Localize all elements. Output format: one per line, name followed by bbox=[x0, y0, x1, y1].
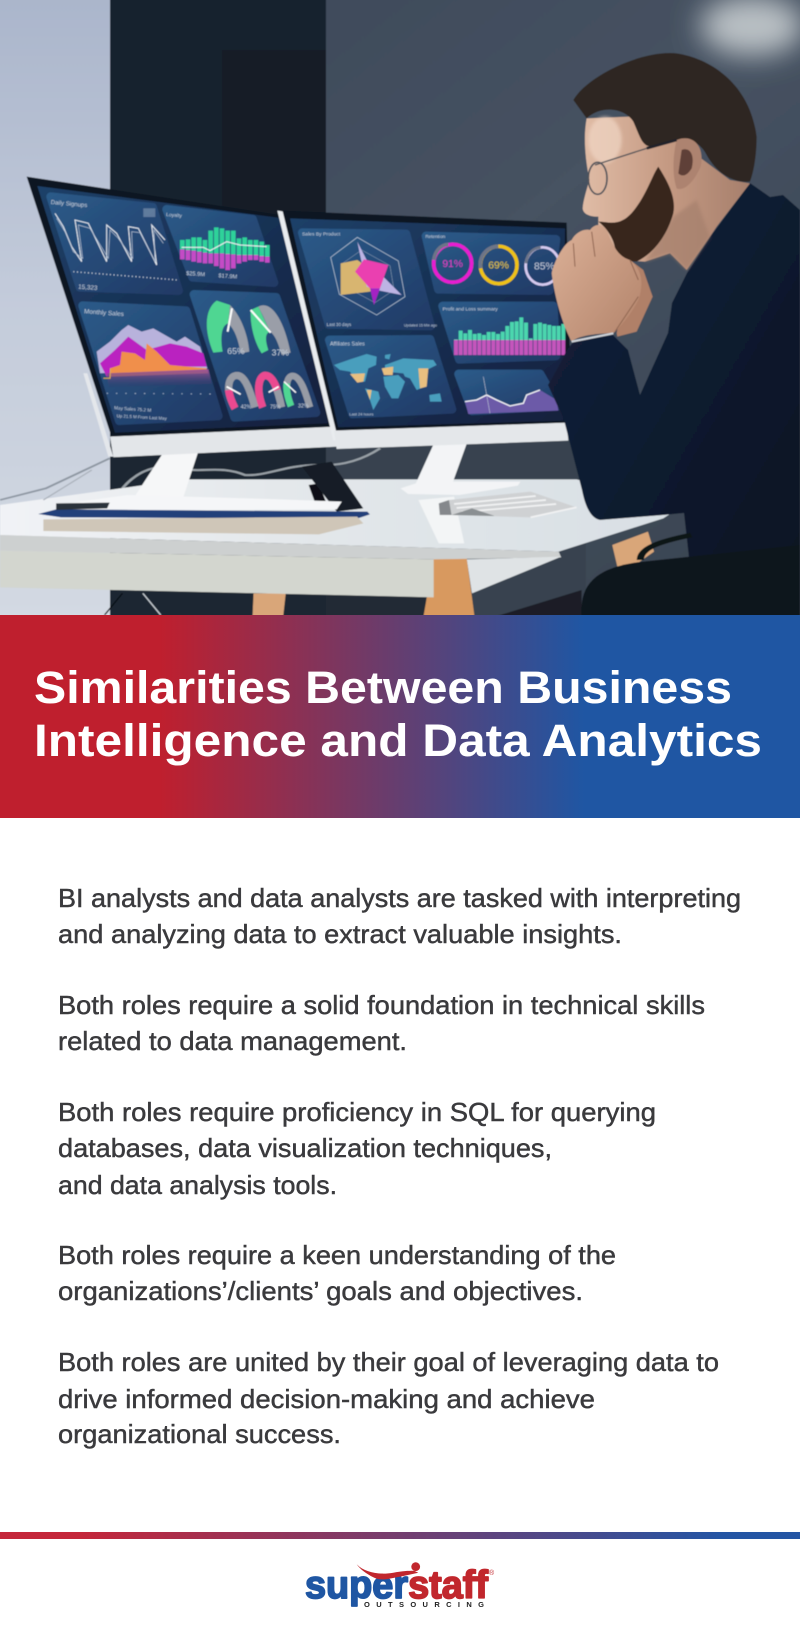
logo figure head bbox=[411, 1562, 420, 1571]
clipboard and papers bbox=[38, 495, 370, 519]
title banner bbox=[0, 615, 800, 818]
panel: monthly sales area chart: May Sales 75.2 M bbox=[114, 405, 152, 413]
panel: loyalty bar chart bbox=[166, 209, 274, 283]
chair seat and back bbox=[495, 535, 800, 617]
logo tagline: OUTSOURCING bbox=[364, 1600, 484, 1609]
paragraph: SQL and tools: databases, data visualization techniques, bbox=[58, 1133, 552, 1163]
panel: gauge charts: 32% bbox=[298, 403, 309, 409]
hair bbox=[573, 53, 757, 182]
panel: retention donuts: Retention bbox=[425, 234, 446, 239]
body text list bbox=[58, 883, 741, 1449]
right monitor screen bbox=[290, 218, 565, 427]
keyboard bbox=[439, 492, 577, 517]
head and arm detail bbox=[552, 53, 757, 342]
panel: profit and loss bar chart: Profit and Loss summary bbox=[443, 307, 498, 313]
panel: gauge charts: 65% bbox=[227, 346, 245, 356]
glasses bbox=[588, 140, 677, 194]
left monitor stand bbox=[128, 453, 198, 507]
logo swoosh bbox=[357, 1564, 418, 1579]
left monitor back edge bbox=[83, 373, 113, 457]
paragraph: technical skills bbox=[58, 990, 705, 1056]
panel: monthly sales area chart: Up 21.5 M From Last May bbox=[117, 413, 168, 421]
notebook bbox=[43, 517, 363, 534]
left monitor chin bbox=[110, 427, 337, 457]
ear bbox=[673, 138, 702, 189]
panel: monthly sales area chart bbox=[83, 306, 218, 421]
desk, cables and stands group bbox=[0, 443, 684, 617]
panel: retention donuts: 91% bbox=[442, 259, 463, 270]
paragraph: interpreting data bbox=[58, 883, 741, 949]
panel: loyalty bar chart: $17.9M bbox=[218, 273, 238, 281]
phone bbox=[302, 462, 363, 512]
panel: daily signups line chart: Daily Signups bbox=[50, 200, 87, 209]
shirt cuff bbox=[572, 333, 613, 342]
title text bbox=[34, 662, 762, 766]
right monitor bezel bbox=[280, 211, 572, 431]
paragraph: decision-making: drive informed decision-making and achieve bbox=[58, 1384, 595, 1414]
logo: SuperStaff Outsourcing bbox=[305, 1562, 495, 1609]
paragraph: interpreting data: and analyzing data to extract valuable insights. bbox=[58, 919, 622, 949]
paragraph: decision-making bbox=[58, 1347, 719, 1449]
logo registered mark: ® bbox=[489, 1569, 495, 1577]
panel: sales by product radar chart: Updated 15 Min ago bbox=[404, 324, 437, 328]
desk front face bbox=[0, 551, 434, 597]
panel: retention donuts: 85% bbox=[534, 261, 555, 272]
panel: gauge charts: 42% bbox=[241, 404, 252, 410]
photo background walls bbox=[0, 0, 800, 630]
neck shadow bbox=[645, 200, 710, 270]
paragraph: goals and objectives: Both roles require a keen understanding of the bbox=[58, 1240, 616, 1270]
panel: affiliate sales world map: Last 24 hours bbox=[349, 412, 373, 417]
left monitor bbox=[27, 177, 337, 457]
desk front edge bbox=[0, 535, 561, 559]
paragraph: technical skills: related to data management. bbox=[58, 1026, 407, 1056]
panel: loyalty bar chart: $25.9M bbox=[186, 271, 205, 278]
under-desk cables bbox=[105, 593, 161, 615]
desk legs bbox=[253, 532, 654, 617]
paragraph: SQL and tools: and data analysis tools. bbox=[58, 1170, 337, 1200]
paragraph: decision-making: organizational success. bbox=[58, 1419, 341, 1449]
paragraph: interpreting data: BI analysts and data analysts are tasked with interpreting bbox=[58, 883, 741, 913]
left monitor screen bbox=[37, 186, 328, 433]
panel: monthly sales area chart: Monthly Sales bbox=[84, 308, 124, 318]
title text: Intelligence and Data Analytics bbox=[34, 715, 762, 766]
logo wordmark: superstaff bbox=[305, 1564, 489, 1607]
panel: affiliate sales world map: Affiliates Sales bbox=[330, 342, 365, 348]
panel: sales by product radar chart: Last 30 days bbox=[327, 322, 351, 327]
paragraph: decision-making: Both roles are united by their goal of leveraging data to bbox=[58, 1347, 719, 1377]
left monitor bezel bbox=[27, 177, 334, 437]
photo: analyst at dual-monitor dashboard desk bbox=[0, 0, 800, 630]
desk top bbox=[0, 479, 684, 552]
suit jacket bbox=[548, 183, 800, 620]
paragraph: SQL and tools bbox=[58, 1097, 656, 1200]
paragraph: goals and objectives bbox=[58, 1240, 616, 1306]
panel: loyalty bar chart: Loyalty bbox=[166, 212, 183, 219]
panel: daily signups line chart: 15,323 bbox=[78, 284, 98, 292]
right monitor stand bbox=[401, 443, 520, 495]
paragraph: SQL and tools: Both roles require proficiency in SQL for querying bbox=[58, 1097, 656, 1127]
panel: stock line chart bbox=[459, 374, 559, 414]
title text: Similarities Between Business bbox=[34, 662, 732, 713]
desk-reflection of stand bbox=[418, 497, 464, 543]
face highlight bbox=[588, 117, 622, 163]
panel: sales by product radar chart: Sales By Product bbox=[302, 231, 341, 237]
panel: daily signups line chart bbox=[50, 197, 179, 292]
neck and face bbox=[583, 117, 750, 270]
right monitor chin bbox=[334, 423, 568, 449]
paragraph: goals and objectives: organizations’/clients’ goals and objectives. bbox=[58, 1276, 583, 1306]
right monitor bbox=[277, 211, 572, 449]
paragraph: technical skills: Both roles require a solid foundation in technical skills bbox=[58, 990, 705, 1020]
connecting wire behind monitors bbox=[122, 448, 380, 488]
panel: sales by product radar chart bbox=[302, 231, 437, 328]
panel: gauge charts: 75% bbox=[270, 404, 281, 410]
left monitor cables bbox=[0, 458, 110, 500]
beard bbox=[598, 167, 674, 262]
right monitor side edge bbox=[277, 211, 338, 441]
panel: retention donuts: 69% bbox=[488, 261, 509, 272]
desk underside bbox=[467, 557, 561, 593]
panel: retention donuts bbox=[425, 234, 560, 291]
analyst man bbox=[495, 53, 800, 620]
panel: affiliate sales world map bbox=[329, 339, 452, 417]
panel: gauge charts: 37% bbox=[272, 347, 289, 357]
panel: profit and loss bar chart bbox=[443, 306, 563, 359]
clasped hands bbox=[552, 225, 653, 342]
panel: gauge charts bbox=[194, 294, 316, 417]
footer gradient rule bbox=[0, 1532, 800, 1539]
